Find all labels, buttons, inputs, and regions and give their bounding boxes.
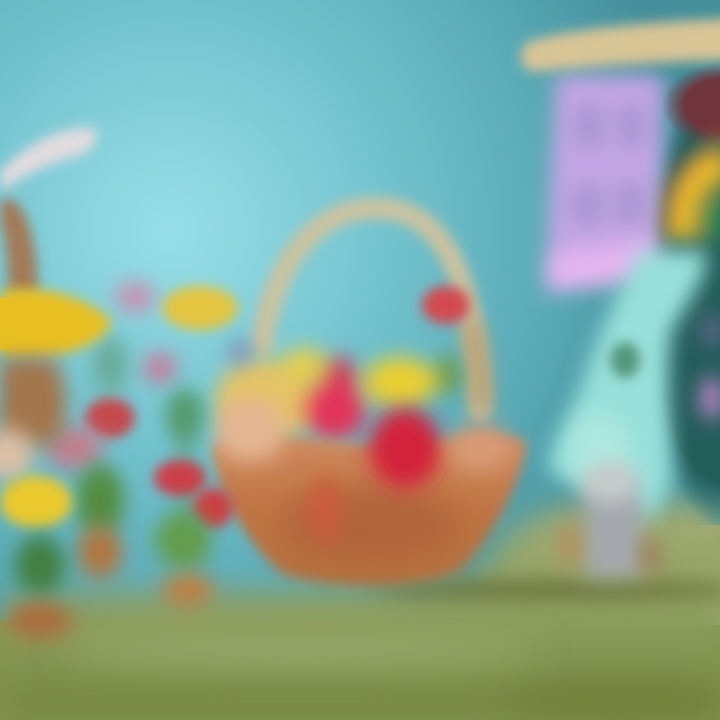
bunny left: ear, stem, hat and body	[0, 128, 112, 638]
red fruit	[369, 408, 441, 488]
body shading	[280, 489, 460, 561]
house body	[640, 75, 720, 525]
left rim highlight	[214, 398, 286, 462]
hat left edge	[0, 298, 12, 350]
woven body	[212, 434, 526, 585]
eggs and fruit	[215, 347, 460, 442]
right rim highlight	[448, 424, 512, 472]
rainbow	[668, 140, 720, 240]
house: roof, window and rainbow	[521, 18, 720, 525]
handle	[262, 208, 480, 410]
handle flower	[422, 286, 470, 324]
flowers: middle group	[115, 282, 252, 606]
bunny figure: mint with grey base	[548, 250, 706, 578]
window pink	[545, 75, 664, 292]
roof	[521, 18, 720, 72]
dark window gap	[662, 63, 720, 147]
pink highlight on body	[309, 478, 341, 542]
lilac spot	[700, 376, 720, 420]
basket	[212, 208, 526, 585]
handle end	[470, 320, 482, 412]
stem	[183, 400, 190, 570]
flowers: left group	[47, 335, 135, 578]
ground: green grass	[0, 500, 720, 720]
